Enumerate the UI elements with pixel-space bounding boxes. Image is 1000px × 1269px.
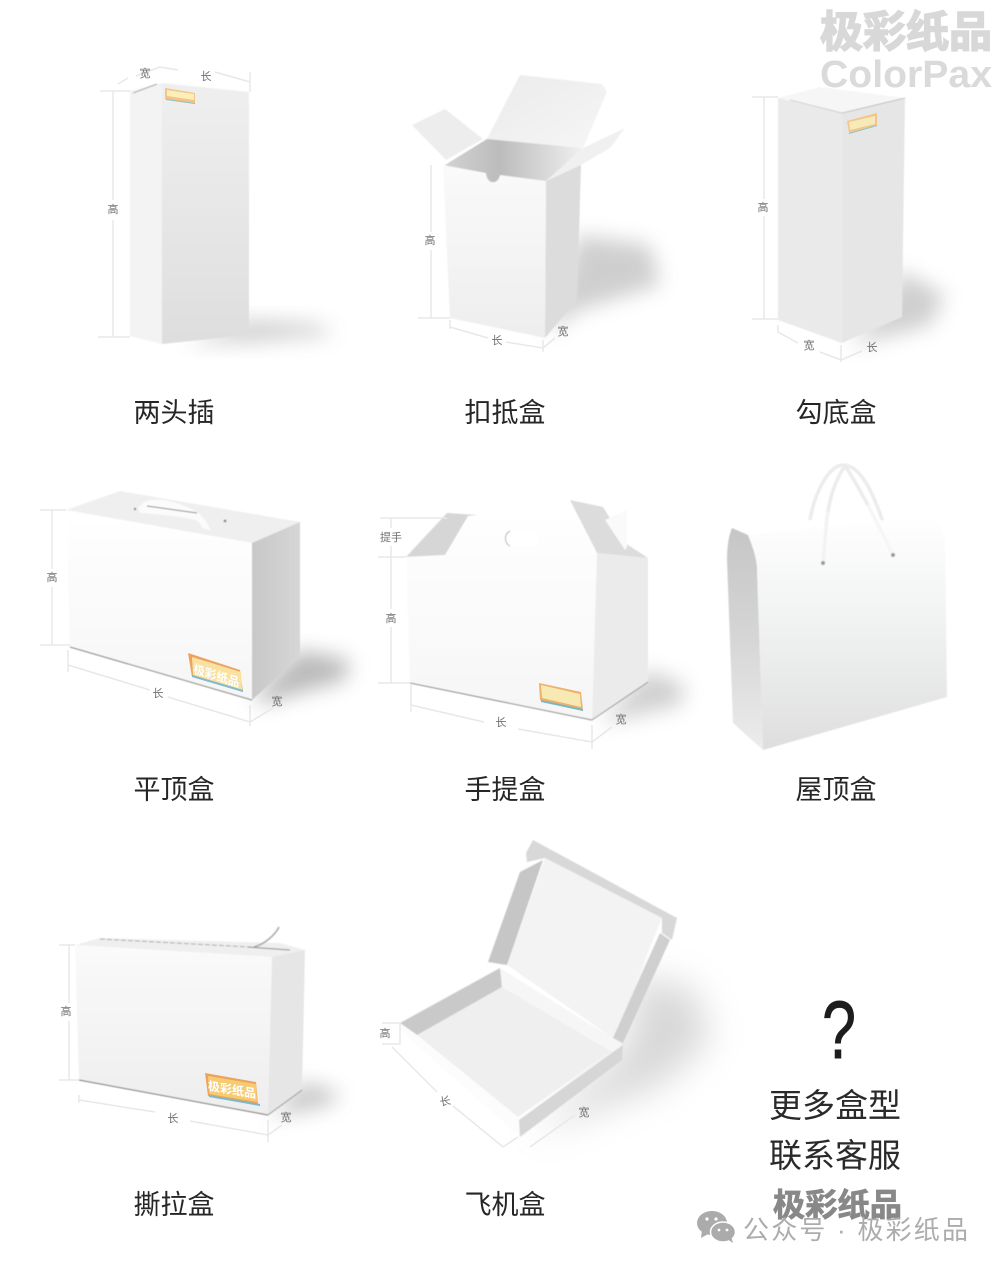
caption: 屋顶盒 xyxy=(796,775,876,805)
handle xyxy=(134,500,226,531)
inner back wall xyxy=(500,968,623,1052)
dimension lines: 宽 xyxy=(140,66,150,80)
left gable xyxy=(406,513,477,557)
product: handle box xyxy=(378,500,685,749)
caption: 勾底盒 xyxy=(796,398,876,428)
side face xyxy=(727,528,763,750)
dimension lines: 长 xyxy=(152,687,164,700)
caption: 撕拉盒 xyxy=(134,1190,214,1220)
dimension lines: 长 xyxy=(492,334,502,347)
shadow xyxy=(600,670,685,724)
handle hole xyxy=(506,530,538,546)
front face xyxy=(748,515,947,750)
dimension lines: 宽 xyxy=(804,338,814,352)
caption: 手提盒 xyxy=(464,775,546,805)
dimension lines: 高 xyxy=(386,611,396,625)
dimension lines: 长 xyxy=(496,716,506,729)
dimension lines: 宽 xyxy=(272,694,282,708)
shadow xyxy=(185,320,335,344)
rope ends xyxy=(823,512,828,563)
dimension lines: 宽 xyxy=(280,1110,292,1124)
colour label xyxy=(205,1073,260,1106)
dimension lines xyxy=(40,510,282,726)
colour label xyxy=(539,683,583,711)
dimension lines: 高 xyxy=(380,1026,390,1040)
colour label: 极彩纸品 xyxy=(208,1078,256,1101)
question mark: ? xyxy=(822,985,856,1076)
rope handle xyxy=(810,465,893,563)
watermark: ColorPax logo: ColorPax xyxy=(820,54,992,96)
product: mailer box xyxy=(380,840,710,1147)
inner left wall xyxy=(400,968,502,1035)
dimension lines: 高 xyxy=(108,202,118,216)
dimension lines: 长 xyxy=(866,341,878,354)
lid top flap xyxy=(526,840,677,940)
product: roof box with rope handle xyxy=(727,465,947,750)
dimension lines: 长 xyxy=(200,70,212,83)
dimension lines: 长 xyxy=(168,1112,178,1125)
shadow xyxy=(850,270,945,346)
dimension lines xyxy=(752,97,878,362)
tear strip xyxy=(254,927,279,947)
left flap xyxy=(412,109,483,160)
colour label xyxy=(188,653,243,692)
right face xyxy=(842,98,905,343)
front face xyxy=(443,165,546,338)
caption: 扣抵盒 xyxy=(464,398,546,428)
left face xyxy=(778,98,842,343)
call to action text: 更多盒型 xyxy=(769,1087,901,1124)
box body xyxy=(130,83,249,344)
lid left flap xyxy=(488,860,543,965)
front face xyxy=(406,505,597,720)
colour label xyxy=(847,113,877,134)
watermark: ColorPax logo xyxy=(820,9,992,96)
side face xyxy=(592,553,648,720)
front face xyxy=(66,510,252,700)
dimension lines: 长 xyxy=(439,1094,452,1109)
dimension lines: 高 xyxy=(60,1004,72,1018)
shadow xyxy=(270,1082,340,1118)
caption: 平顶盒 xyxy=(134,775,214,805)
brand name: 极彩纸品 xyxy=(773,1187,902,1223)
shadow xyxy=(255,650,350,704)
call to action text: 联系客服 xyxy=(769,1137,901,1174)
dimension lines xyxy=(380,1023,590,1147)
colour label: 极彩纸品 xyxy=(193,661,240,690)
WeChat account attribution: 公众号 · 极彩纸品 xyxy=(743,1215,968,1245)
product: lock-bottom box xyxy=(752,87,945,362)
dimension lines xyxy=(418,165,568,352)
caption: 两头插 xyxy=(134,398,214,428)
caption: 飞机盒 xyxy=(464,1190,546,1220)
dimension lines: 宽 xyxy=(578,1105,590,1119)
dimension lines xyxy=(59,945,292,1142)
top xyxy=(66,491,300,543)
right outer wall xyxy=(519,1045,623,1137)
top xyxy=(75,938,305,957)
side face xyxy=(545,165,581,338)
inner walls xyxy=(445,139,583,186)
dimension lines: 宽 xyxy=(616,712,626,726)
dimension lines xyxy=(98,66,250,337)
side face xyxy=(268,950,305,1115)
dimension lines: 高 xyxy=(46,570,58,584)
product: buckle box xyxy=(412,75,660,352)
lid right flap xyxy=(613,933,670,1043)
dimension lines: 宽 xyxy=(558,324,568,338)
watermark: ColorPax logo: 极彩纸品 xyxy=(820,9,992,57)
call to action text xyxy=(769,1087,901,1174)
colour label xyxy=(165,88,195,104)
dimension lines xyxy=(378,518,626,749)
product: flat-top box xyxy=(40,491,350,726)
back flap xyxy=(487,75,607,148)
lid inner xyxy=(507,858,662,1038)
front wall xyxy=(400,1023,520,1137)
right gable flap xyxy=(570,500,648,558)
top xyxy=(778,87,905,113)
front face xyxy=(75,945,272,1115)
product: tear-strip box xyxy=(59,927,340,1142)
icon: WeChat xyxy=(697,1211,736,1243)
side face xyxy=(252,522,300,700)
shadow xyxy=(548,235,660,335)
right flap xyxy=(546,128,625,181)
dimension lines: 提手 xyxy=(380,530,402,544)
dimension lines: 高 xyxy=(424,233,436,247)
base floor xyxy=(417,987,612,1117)
product: two-end tuck box xyxy=(98,66,335,344)
dimension lines: 高 xyxy=(758,200,768,214)
shadow xyxy=(530,975,710,1135)
